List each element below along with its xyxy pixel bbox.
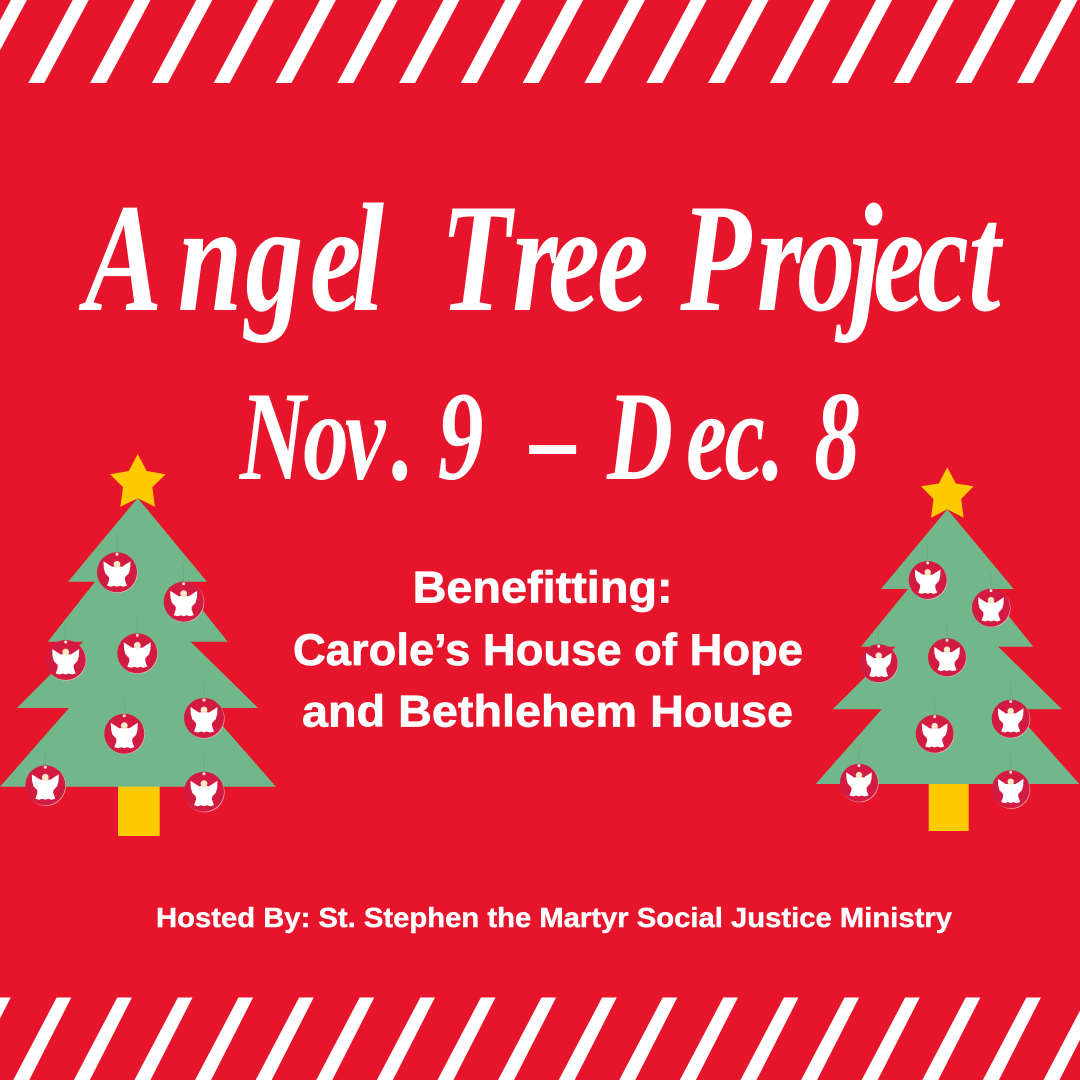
tree trunk bbox=[118, 786, 160, 836]
title: Angel Tree Project bbox=[78, 172, 1004, 344]
star bbox=[921, 467, 974, 518]
tree foliage bbox=[0, 498, 276, 787]
host line: Hosted By: St. Stephen the Martyr Social Justice Ministry bbox=[156, 902, 952, 933]
benefitting heading: Benefitting: bbox=[413, 563, 673, 613]
beneficiary line two: and Bethlehem House bbox=[302, 687, 793, 737]
tree trunk bbox=[929, 784, 969, 831]
left christmas tree bbox=[0, 454, 276, 836]
tree foliage bbox=[816, 509, 1079, 784]
dates: Nov. 9 – Dec. 8 bbox=[238, 365, 860, 507]
star bbox=[110, 454, 166, 507]
benefitting text block bbox=[293, 563, 803, 737]
angel ornaments bbox=[25, 535, 225, 812]
bottom candy stripes bbox=[0, 998, 1080, 1080]
right christmas tree bbox=[816, 467, 1079, 831]
top candy stripes bbox=[0, 0, 1077, 83]
beneficiary line one: Carole’s House of Hope bbox=[293, 625, 803, 675]
angel ornaments bbox=[840, 545, 1030, 809]
